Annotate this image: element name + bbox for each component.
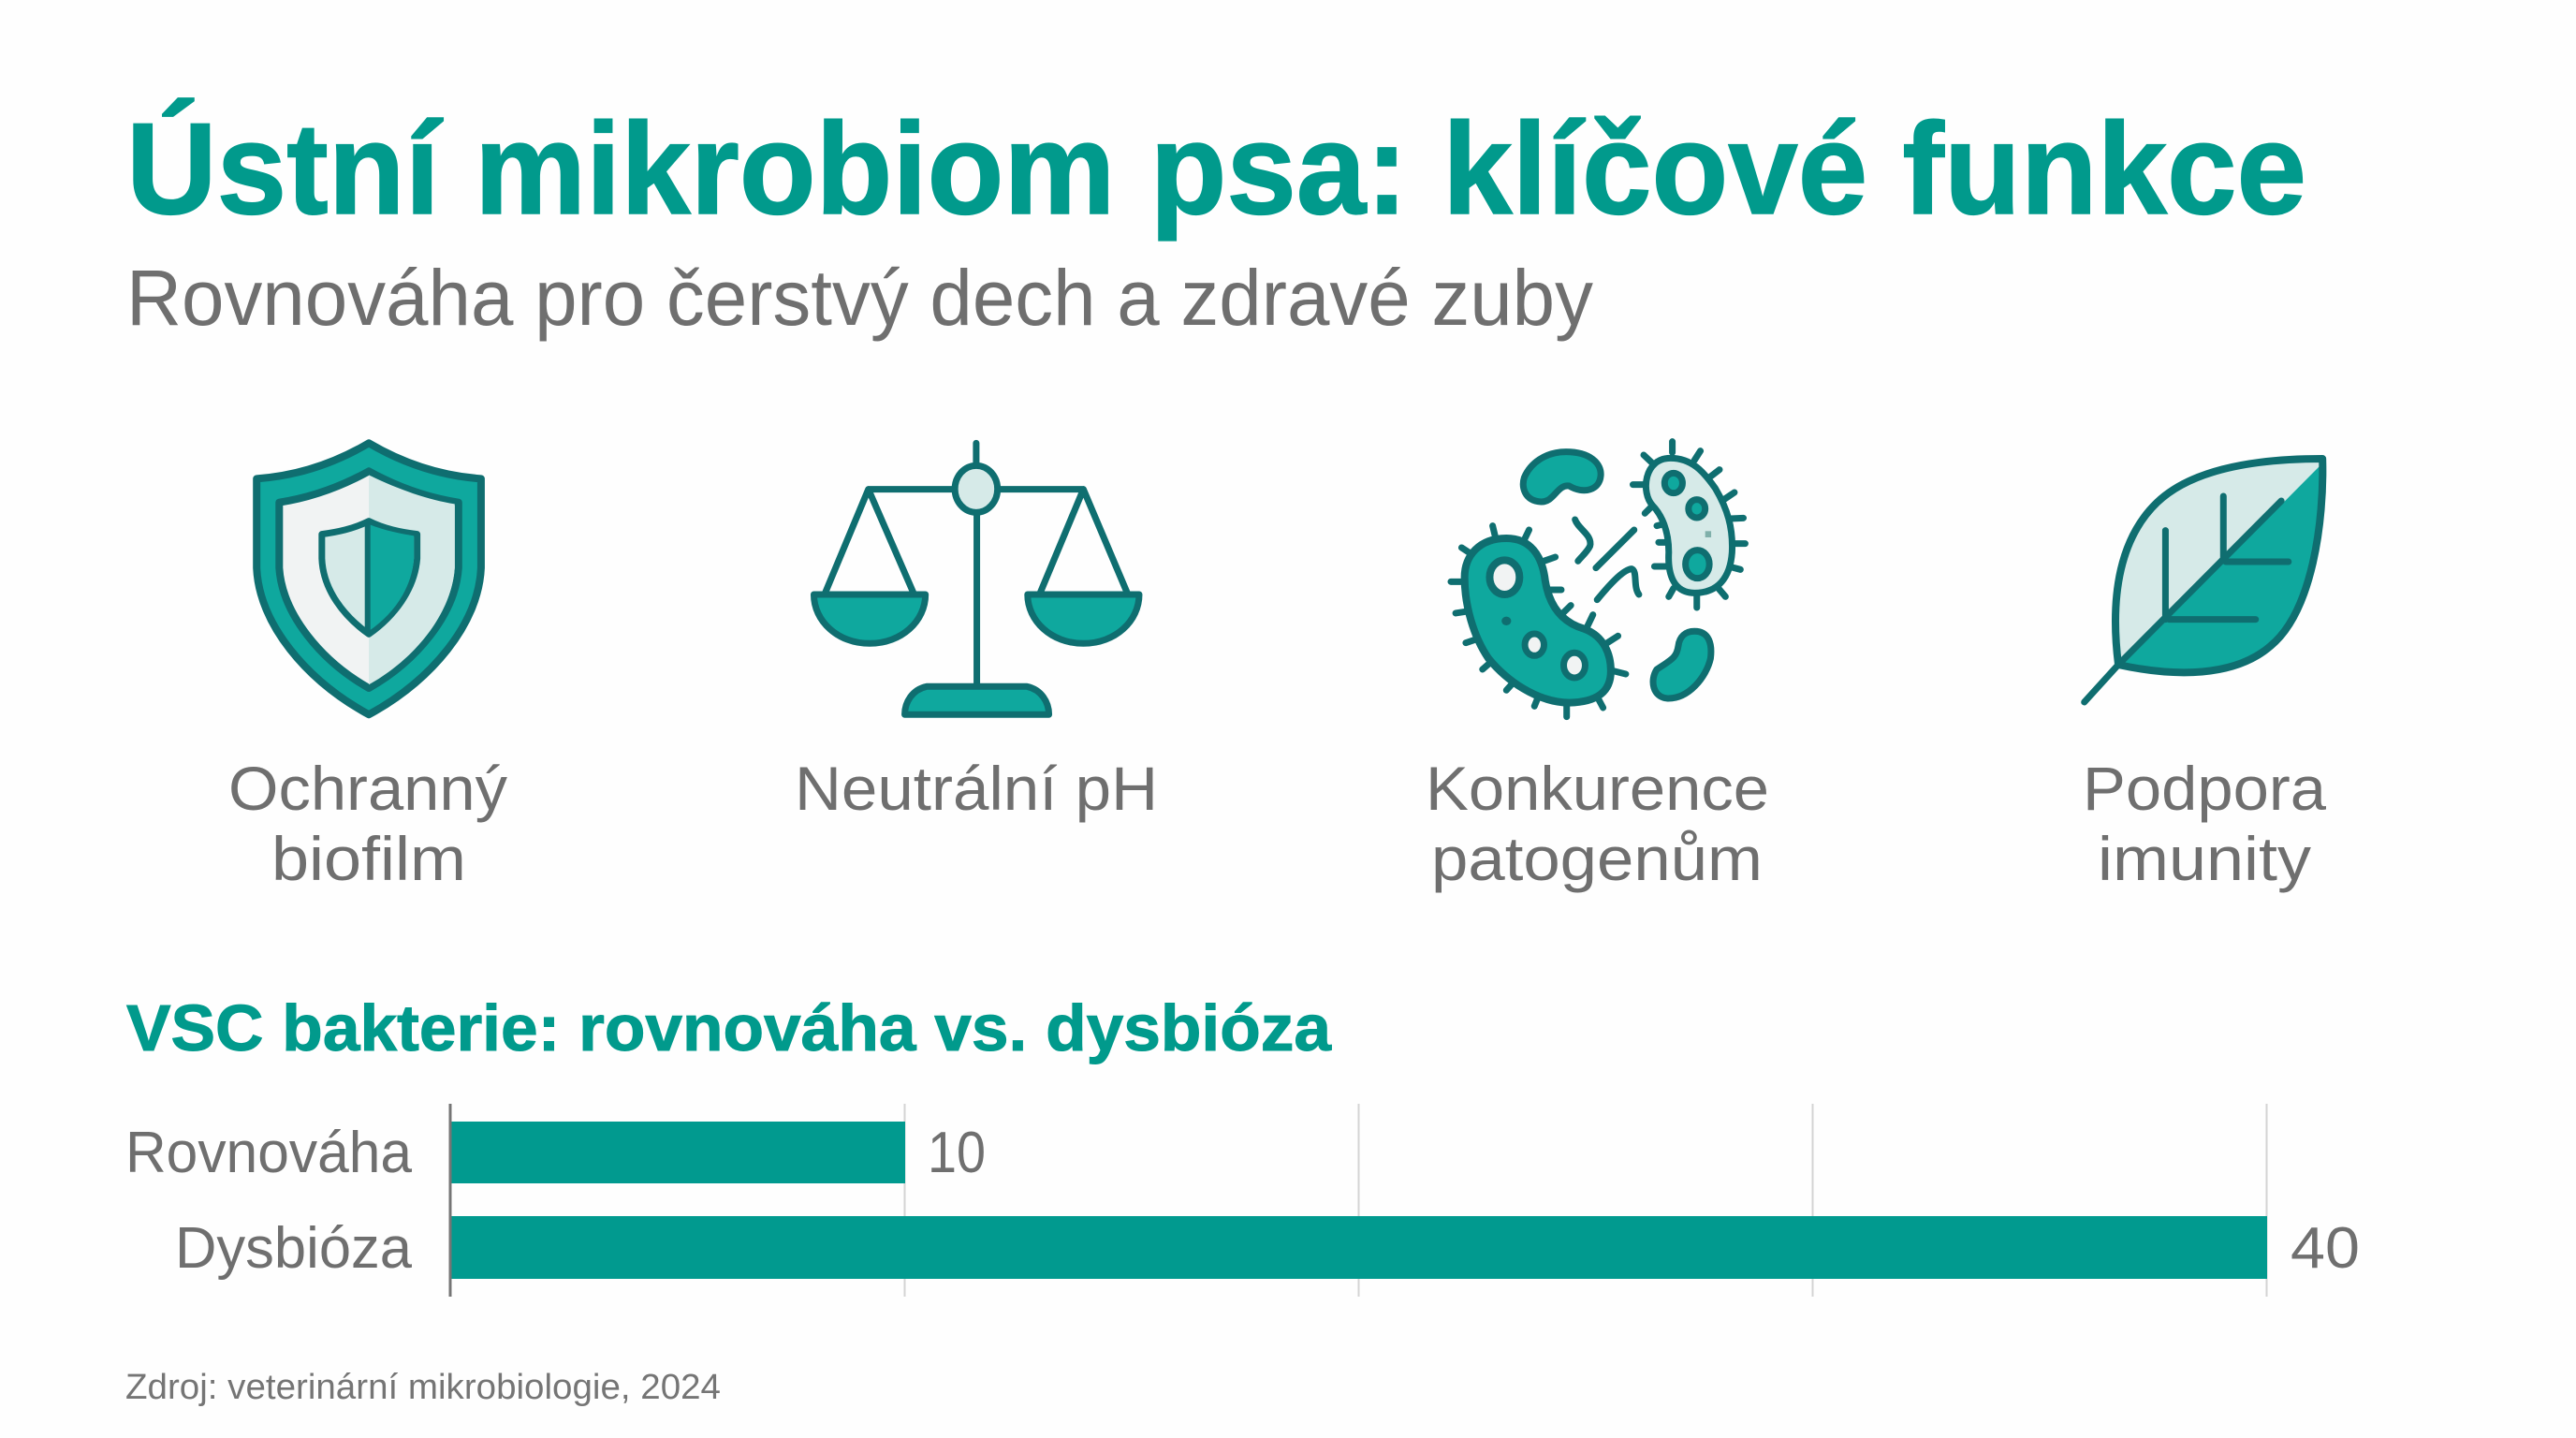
icon: balance scale <box>813 443 1139 714</box>
label: pathogen competition: Konkurence <box>1426 754 1769 823</box>
label: immunity support: imunity <box>2098 824 2311 893</box>
subtitle: Rovnováha pro čerstvý dech a zdravé zuby <box>126 254 1593 342</box>
label: pathogen competition <box>1426 754 1769 893</box>
label: protective biofilm: biofilm <box>271 824 466 893</box>
category label: balance: Rovnováha <box>125 1121 412 1185</box>
label: protective biofilm: Ochranný <box>228 754 507 823</box>
bar: balance value 10 <box>451 1122 905 1183</box>
axis <box>449 1104 451 1297</box>
category label: dysbiosis: Dysbióza <box>175 1216 413 1281</box>
value label 40: 40 <box>2291 1216 2360 1281</box>
icon: bacteria <box>1451 442 1745 717</box>
bar: dysbiosis value 40 <box>451 1216 2267 1279</box>
bar chart <box>125 1104 2360 1297</box>
label: pathogen competition: patogenům <box>1431 824 1763 893</box>
icon: shield <box>256 443 481 714</box>
label: immunity support: Podpora <box>2083 754 2326 823</box>
chart heading: VSC bakterie: rovnováha vs. dysbióza <box>126 991 1332 1064</box>
icon: leaf <box>2085 459 2322 702</box>
source note: Zdroj: veterinární mikrobiologie, 2024 <box>125 1368 721 1407</box>
title: Ústní mikrobiom psa: klíčové funkce <box>126 96 2306 242</box>
label: neutral pH: Neutrální pH <box>795 754 1158 823</box>
label: immunity support <box>2083 754 2326 893</box>
value label 10: 10 <box>928 1121 986 1185</box>
label: protective biofilm <box>228 754 507 893</box>
